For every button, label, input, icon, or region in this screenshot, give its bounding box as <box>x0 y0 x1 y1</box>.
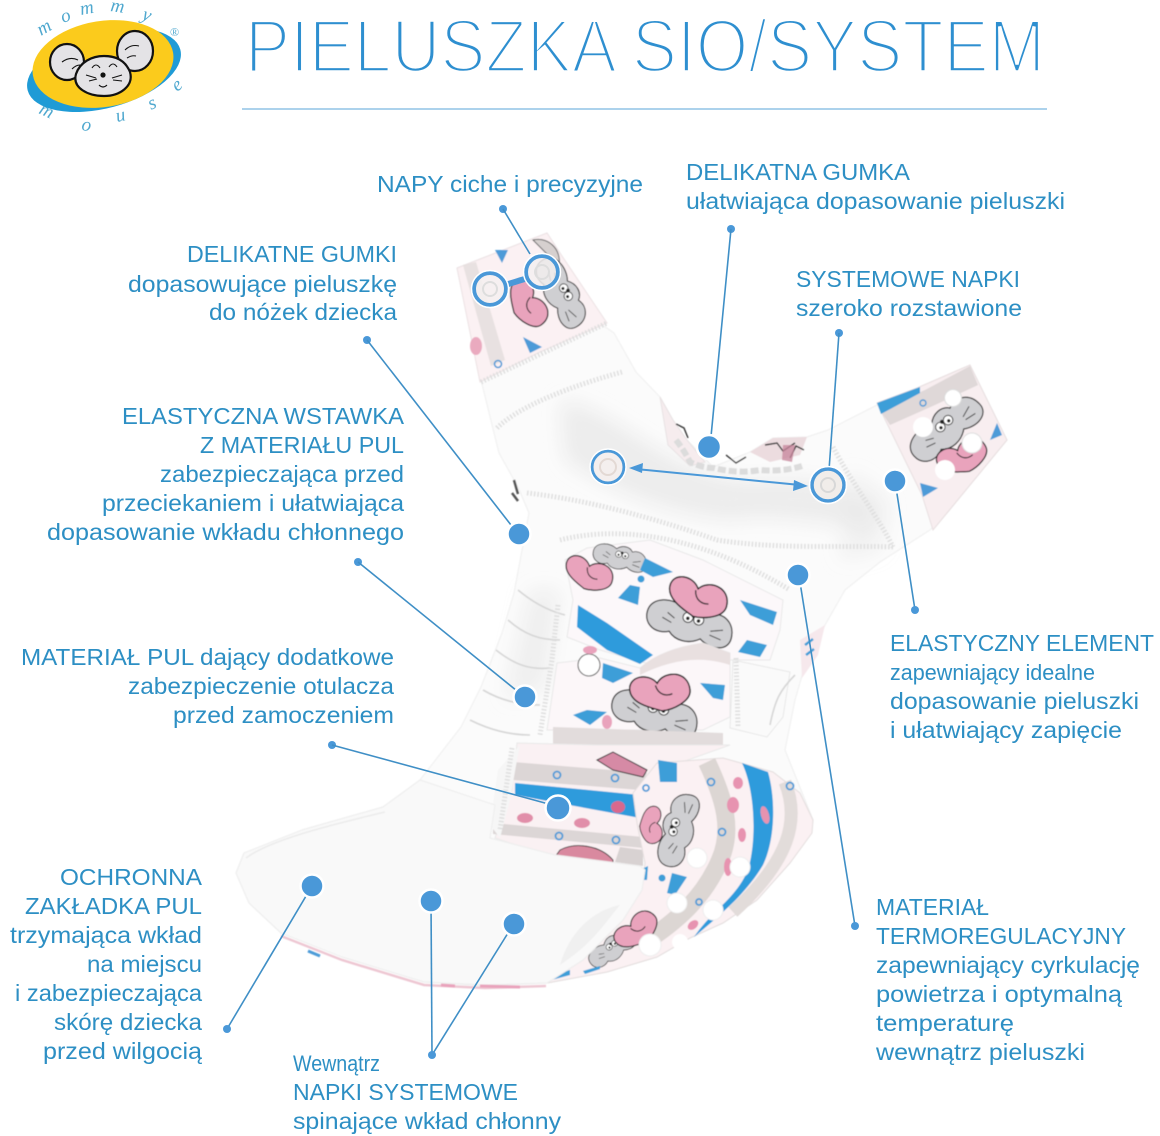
callout: delikatna gumka <box>686 159 1065 459</box>
diaper outer body <box>236 233 1007 986</box>
waist and mesh seams <box>481 323 893 590</box>
logo lettering: m <box>33 15 55 40</box>
text: wewnątrz napki systemowe: NAPKI SYSTEMOWE <box>293 1079 518 1105</box>
front flap print <box>547 758 813 983</box>
interior shading <box>300 400 890 960</box>
arrow between snaps <box>629 463 808 491</box>
callout: delikatne gumki <box>128 241 530 546</box>
inner print panel 1 <box>561 540 783 665</box>
snap rings pair <box>472 254 560 308</box>
inner print panel 2 <box>547 643 730 745</box>
text: elastyczny element: dopasowanie pieluszki <box>890 688 1139 714</box>
right wing print <box>877 365 1007 530</box>
text: delikatne gumki: DELIKATNE GUMKI <box>187 241 397 267</box>
text: delikatna gumka: DELIKATNA GUMKA <box>686 159 910 185</box>
callout: ochronna zakładka <box>10 864 324 1064</box>
logo lettering: o <box>58 5 74 28</box>
text: wewnątrz napki systemowe <box>293 1051 561 1134</box>
inner print panel 3 striped <box>493 743 730 866</box>
logo mouse head <box>50 31 153 96</box>
text: materiał pul: zabezpieczenie otulacza <box>128 673 395 699</box>
logo lettering: o <box>80 114 93 136</box>
text: materiał termoregulacyjny: TERMOREGULACYJNY <box>876 923 1126 949</box>
text: materiał termoregulacyjny <box>875 894 1140 1065</box>
text: elastyczna wstawka: Z MATERIAŁU PUL <box>200 432 404 458</box>
logo lettering: e <box>167 74 187 96</box>
text: ochronna zakładka: trzymająca wkład <box>10 922 202 948</box>
callout: elastyczny element <box>884 470 1154 743</box>
text: delikatne gumki <box>128 241 398 325</box>
text: elastyczny element: zapewniający idealne <box>890 660 1095 685</box>
diaper photo illustration <box>236 233 1007 988</box>
callout: systemowe napki <box>590 266 1022 504</box>
text: materiał pul: przed zamoczeniem <box>173 702 394 728</box>
text: delikatna gumka <box>686 159 1065 214</box>
snap ring left <box>590 449 626 485</box>
text: elastyczna wstawka: przeciekaniem i ułatwiająca <box>102 490 405 516</box>
text: elastyczny element <box>890 630 1154 743</box>
text: elastyczna wstawka: dopasowanie wkładu chłonnego <box>47 519 404 545</box>
text: wewnątrz napki systemowe: spinające wkład chłonny <box>293 1108 561 1134</box>
text: elastyczny element: i ułatwiający zapięcie <box>890 717 1122 743</box>
logo lettering: s <box>144 92 160 115</box>
logo: Mommy Mouse <box>18 0 190 136</box>
callout: napy <box>377 171 643 308</box>
text: delikatne gumki: do nóżek dziecka <box>209 299 398 325</box>
left wing print <box>457 233 607 382</box>
text: elastyczna wstawka: zabezpieczająca przed <box>160 461 404 487</box>
callout: materiał pul <box>21 644 570 820</box>
stitched side tab <box>490 745 520 838</box>
logo ellipse blue <box>18 13 190 127</box>
logo ellipse yellow <box>26 10 180 118</box>
text: materiał termoregulacyjny: zapewniający cyrkulację <box>876 952 1140 978</box>
text: materiał termoregulacyjny: wewnątrz pieluszki <box>875 1039 1085 1065</box>
text: systemowe napki: SYSTEMOWE NAPKI <box>796 266 1020 292</box>
text: ochronna zakładka <box>10 864 203 1064</box>
callout: materiał termoregulacyjny <box>786 564 1140 1065</box>
elastic leg ruffle print <box>512 397 825 678</box>
text: materiał termoregulacyjny: powietrza i optymalną <box>876 981 1123 1007</box>
text: materiał termoregulacyjny: temperaturę <box>876 1010 1014 1036</box>
text: systemowe napki: szeroko rozstawione <box>796 295 1022 321</box>
text: materiał pul <box>21 644 395 728</box>
text: systemowe napki <box>796 266 1022 321</box>
text: elastyczna wstawka: ELASTYCZNA WSTAWKA <box>122 403 404 429</box>
text: ochronna zakładka: na miejscu <box>87 951 202 977</box>
white protective tab <box>236 780 645 988</box>
text: materiał pul: MATERIAŁ PUL dający dodatkowe <box>21 644 394 670</box>
snap ring right <box>810 466 846 504</box>
logo lettering: ® <box>170 25 179 39</box>
logo lettering: m <box>36 98 57 123</box>
text: napy: NAPY ciche i precyzyjne <box>377 171 643 197</box>
text: wewnątrz napki systemowe: Wewnątrz <box>293 1051 380 1076</box>
right waist tab <box>730 660 790 737</box>
text: elastyczny element: ELASTYCZNY ELEMENT <box>890 630 1154 656</box>
callout: wewnątrz napki systemowe <box>293 890 561 1134</box>
text: delikatna gumka: ułatwiająca dopasowanie pieluszki <box>686 188 1065 214</box>
callout: elastyczna wstawka <box>47 403 536 708</box>
text: ochronna zakładka: i zabezpieczająca <box>15 980 203 1006</box>
text: delikatne gumki: dopasowujące pieluszkę <box>128 271 397 297</box>
logo lettering <box>33 0 187 136</box>
logo lettering: u <box>114 104 127 127</box>
text: ochronna zakładka: skórę dziecka <box>54 1009 203 1035</box>
left gathers <box>470 590 795 735</box>
title: PIELUSZKA SIO/SYSTEM <box>245 4 1045 88</box>
text: ochronna zakładka: OCHRONNA <box>60 864 202 890</box>
text: ochronna zakładka: przed wilgocią <box>43 1038 203 1064</box>
text: elastyczna wstawka <box>47 403 405 545</box>
logo lettering: y <box>137 3 155 27</box>
text: ochronna zakładka: ZAKŁADKA PUL <box>25 893 202 919</box>
text: materiał termoregulacyjny: MATERIAŁ <box>876 894 989 920</box>
